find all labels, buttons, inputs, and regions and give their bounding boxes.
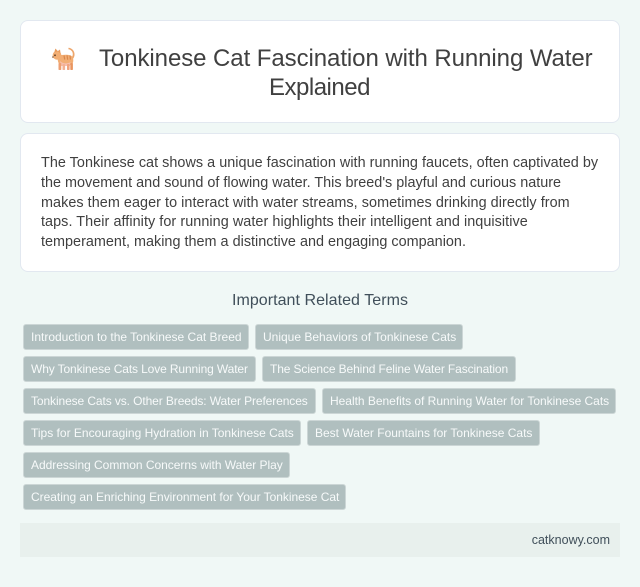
chip: Tips for Encouraging Hydration in Tonkinese Cats (31, 426, 294, 440)
description text (41, 155, 598, 250)
chip: Health Benefits of Running Water for Tonkinese Cats (330, 394, 609, 408)
chip: Introduction to the Tonkinese Cat Breed (31, 330, 242, 344)
chip (307, 420, 540, 446)
chip: Creating an Enriching Environment for Your Tonkinese Cat (31, 490, 339, 504)
chip (23, 356, 256, 382)
description text: the movement and sound of flowing water. This breed's playful and curious nature (41, 175, 561, 191)
header card (20, 20, 620, 123)
description card (20, 133, 620, 272)
chip: Unique Behaviors of Tonkinese Cats (263, 330, 456, 344)
chip (23, 452, 290, 478)
chip: Why Tonkinese Cats Love Running Water (31, 362, 248, 376)
chip: The Science Behind Feline Water Fascination (270, 362, 508, 376)
description text: taps. Their affinity for running water highlights their intelligent and inquisitive (41, 214, 528, 230)
footer (20, 523, 620, 557)
title line 2: Explained (269, 74, 370, 101)
heading: related terms: Important Related Terms (232, 292, 408, 309)
description text: temperament, making them a distinctive and engaging companion. (41, 234, 466, 250)
title line 1: Tonkinese Cat Fascination with Running Water (99, 45, 593, 72)
chip (23, 420, 301, 446)
chip (255, 324, 463, 350)
chip (23, 484, 346, 510)
chip (262, 356, 516, 382)
description text: makes them eager to interact with water streams, sometimes drinking directly from (41, 194, 570, 210)
chip: Tonkinese Cats vs. Other Breeds: Water Preferences (31, 394, 308, 408)
icon: cat (52, 48, 74, 70)
footer source: catknowy.com (532, 533, 610, 547)
chip (322, 388, 616, 414)
chip: Addressing Common Concerns with Water Play (31, 458, 283, 472)
description text: The Tonkinese cat shows a unique fascination with running faucets, often captivated by (41, 155, 598, 171)
chip (23, 324, 249, 350)
term chips (23, 324, 616, 510)
chip: Best Water Fountains for Tonkinese Cats (315, 426, 532, 440)
chip (23, 388, 316, 414)
